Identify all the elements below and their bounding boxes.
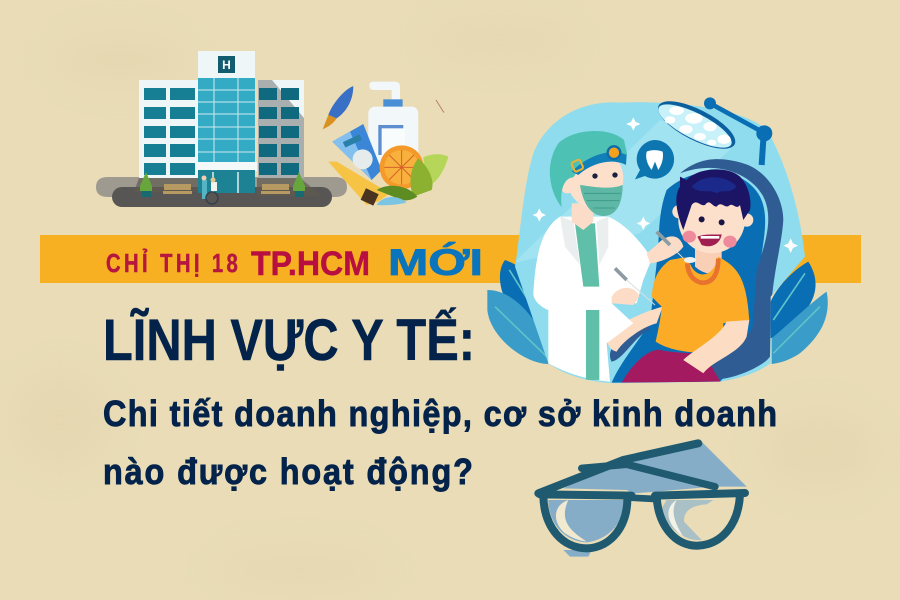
left wing xyxy=(139,80,199,178)
brush xyxy=(328,86,353,118)
planting beds xyxy=(134,178,322,196)
leaves right xyxy=(770,262,816,338)
title: LĨNH VỰC Y TẾ: xyxy=(103,308,475,373)
speech bubble with tooth xyxy=(635,140,674,179)
armrest xyxy=(610,323,650,362)
lime xyxy=(423,154,448,187)
patient head xyxy=(678,202,744,254)
patient shirt xyxy=(652,257,749,353)
benches xyxy=(163,184,290,194)
coat lapels xyxy=(560,216,608,265)
banner text xyxy=(106,241,483,283)
banner label: Mới: MỚI xyxy=(388,241,483,283)
dentist coat xyxy=(533,217,650,382)
card xyxy=(332,124,382,180)
frame xyxy=(540,493,745,496)
wheelchair and nurse xyxy=(202,180,207,199)
patient trousers xyxy=(622,350,721,383)
sparkles xyxy=(533,117,798,253)
icon: dental illustration xyxy=(487,92,828,383)
dentist shirt xyxy=(575,223,599,287)
dentist mask xyxy=(580,185,623,216)
lamp arm xyxy=(710,103,765,133)
glass tower xyxy=(198,78,255,163)
dentist hands xyxy=(647,236,683,263)
patient right arm xyxy=(683,320,749,373)
ground xyxy=(96,177,347,197)
light blue backdrop xyxy=(515,102,805,383)
lamp head xyxy=(652,92,742,158)
subtitle line 1: Chi tiết doanh nghiệp, cơ sở kinh doanh xyxy=(103,394,777,434)
dental chair xyxy=(612,172,765,383)
patient hair xyxy=(676,169,751,230)
tube xyxy=(328,162,390,205)
icon: cosmetics xyxy=(323,82,448,206)
icon: glasses xyxy=(538,440,747,557)
dentist head xyxy=(567,162,624,204)
shirt collar xyxy=(687,258,718,283)
orange slice xyxy=(380,145,424,189)
windows xyxy=(144,88,195,175)
dentist neck xyxy=(572,203,593,230)
leaves left xyxy=(500,260,551,338)
icon: hospital xyxy=(96,51,347,207)
lamp stand xyxy=(762,140,763,165)
banner label: TP.HCM: TP.HCM xyxy=(251,245,370,283)
temple arms xyxy=(538,443,698,493)
yellow banner strip xyxy=(40,235,861,283)
patient left arm xyxy=(607,307,663,352)
pump bottle xyxy=(369,82,400,100)
entrance xyxy=(196,162,257,171)
patient neck xyxy=(695,247,722,273)
left lens tint xyxy=(548,500,624,542)
trees xyxy=(140,172,152,191)
banner label: Chỉ thị 18: CHỈ THỊ 18 xyxy=(106,246,238,278)
right wing xyxy=(258,80,304,178)
dental tools xyxy=(615,232,670,280)
leaves xyxy=(410,158,432,197)
right lens tint xyxy=(662,500,713,540)
tower top with H sign xyxy=(198,51,255,79)
icon: hospital: H xyxy=(222,58,231,72)
subtitle line 2: nào được hoạt động? xyxy=(103,452,473,492)
blue folded lens xyxy=(563,440,747,493)
